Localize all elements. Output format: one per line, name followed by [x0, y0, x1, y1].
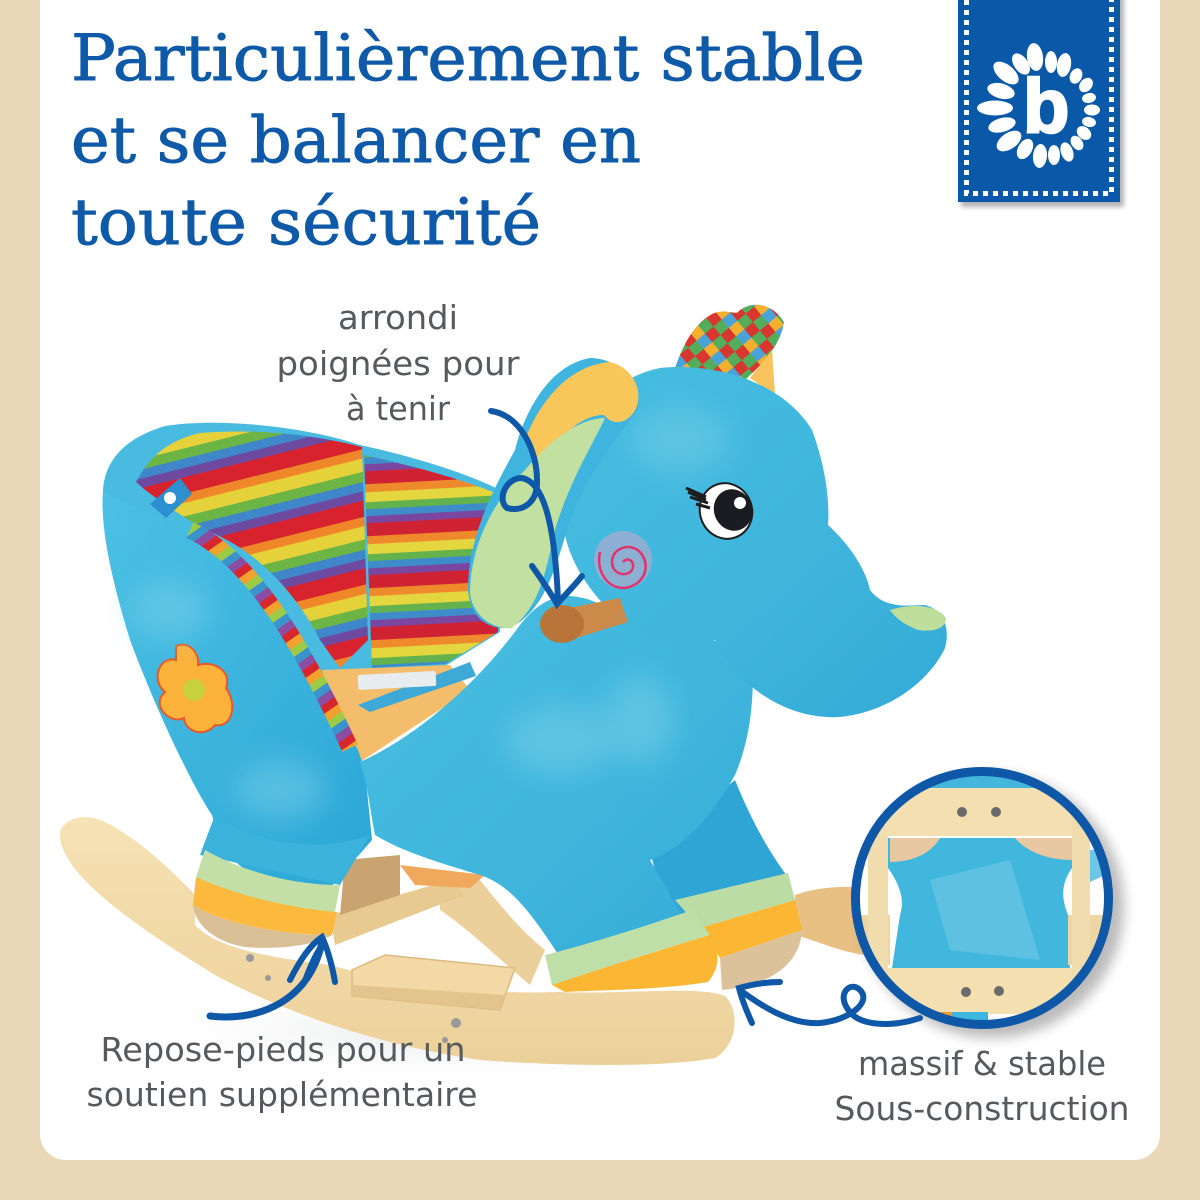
inset: underside detail	[855, 770, 1124, 1038]
back rest outer	[103, 423, 500, 720]
back rest rainbow right	[364, 455, 498, 668]
foot rest	[352, 955, 515, 1010]
back rest rainbow left	[136, 431, 368, 668]
eye	[686, 476, 760, 546]
arrow: foot rest	[210, 937, 335, 1017]
arrow: base	[739, 982, 920, 1024]
side panel of seat	[103, 490, 372, 888]
title: et se balancer en	[71, 104, 641, 178]
head and trunk	[562, 367, 947, 717]
far belly foot	[400, 865, 485, 888]
near rocker	[60, 817, 735, 1065]
label: foot rest: soutien supplémentaire	[86, 1075, 477, 1114]
title: toute sécurité	[71, 186, 541, 260]
label: handles: poignées pour	[276, 344, 520, 383]
ear colorful	[672, 305, 784, 395]
head mottling	[630, 405, 730, 475]
seat and belt	[322, 665, 470, 762]
label: handles: à tenir	[346, 389, 450, 428]
icon: flower petals	[977, 42, 1100, 169]
near ear	[468, 358, 639, 628]
label: foot rest	[86, 1030, 477, 1114]
logo tag	[958, 0, 1124, 207]
cheek spiral	[594, 531, 652, 589]
plush mottling	[130, 580, 675, 820]
product: rocking elephant	[60, 305, 947, 1085]
title	[71, 22, 865, 260]
title: Particulièrement stable	[71, 22, 865, 96]
trunk tip	[890, 606, 946, 631]
label on seat	[150, 478, 192, 518]
icon: letter b: b	[1023, 64, 1069, 149]
near front leg bands	[545, 910, 717, 992]
label: base	[834, 1044, 1130, 1128]
icon: flower	[158, 645, 232, 732]
arrow: handles	[491, 411, 582, 604]
label: handles: arrondi	[338, 298, 458, 337]
ground shadow	[130, 975, 810, 1085]
handle peg	[540, 598, 628, 643]
far front leg	[650, 780, 802, 990]
label: base: massif & stable	[858, 1044, 1106, 1083]
label: handles	[276, 298, 520, 428]
label: foot rest: Repose-pieds pour un	[100, 1030, 466, 1069]
far rocker	[330, 855, 865, 985]
rear leg	[193, 815, 370, 948]
label: base: Sous-construction	[834, 1089, 1130, 1128]
rainbow trim	[190, 530, 350, 748]
body	[360, 596, 753, 965]
inset body	[888, 838, 1072, 968]
